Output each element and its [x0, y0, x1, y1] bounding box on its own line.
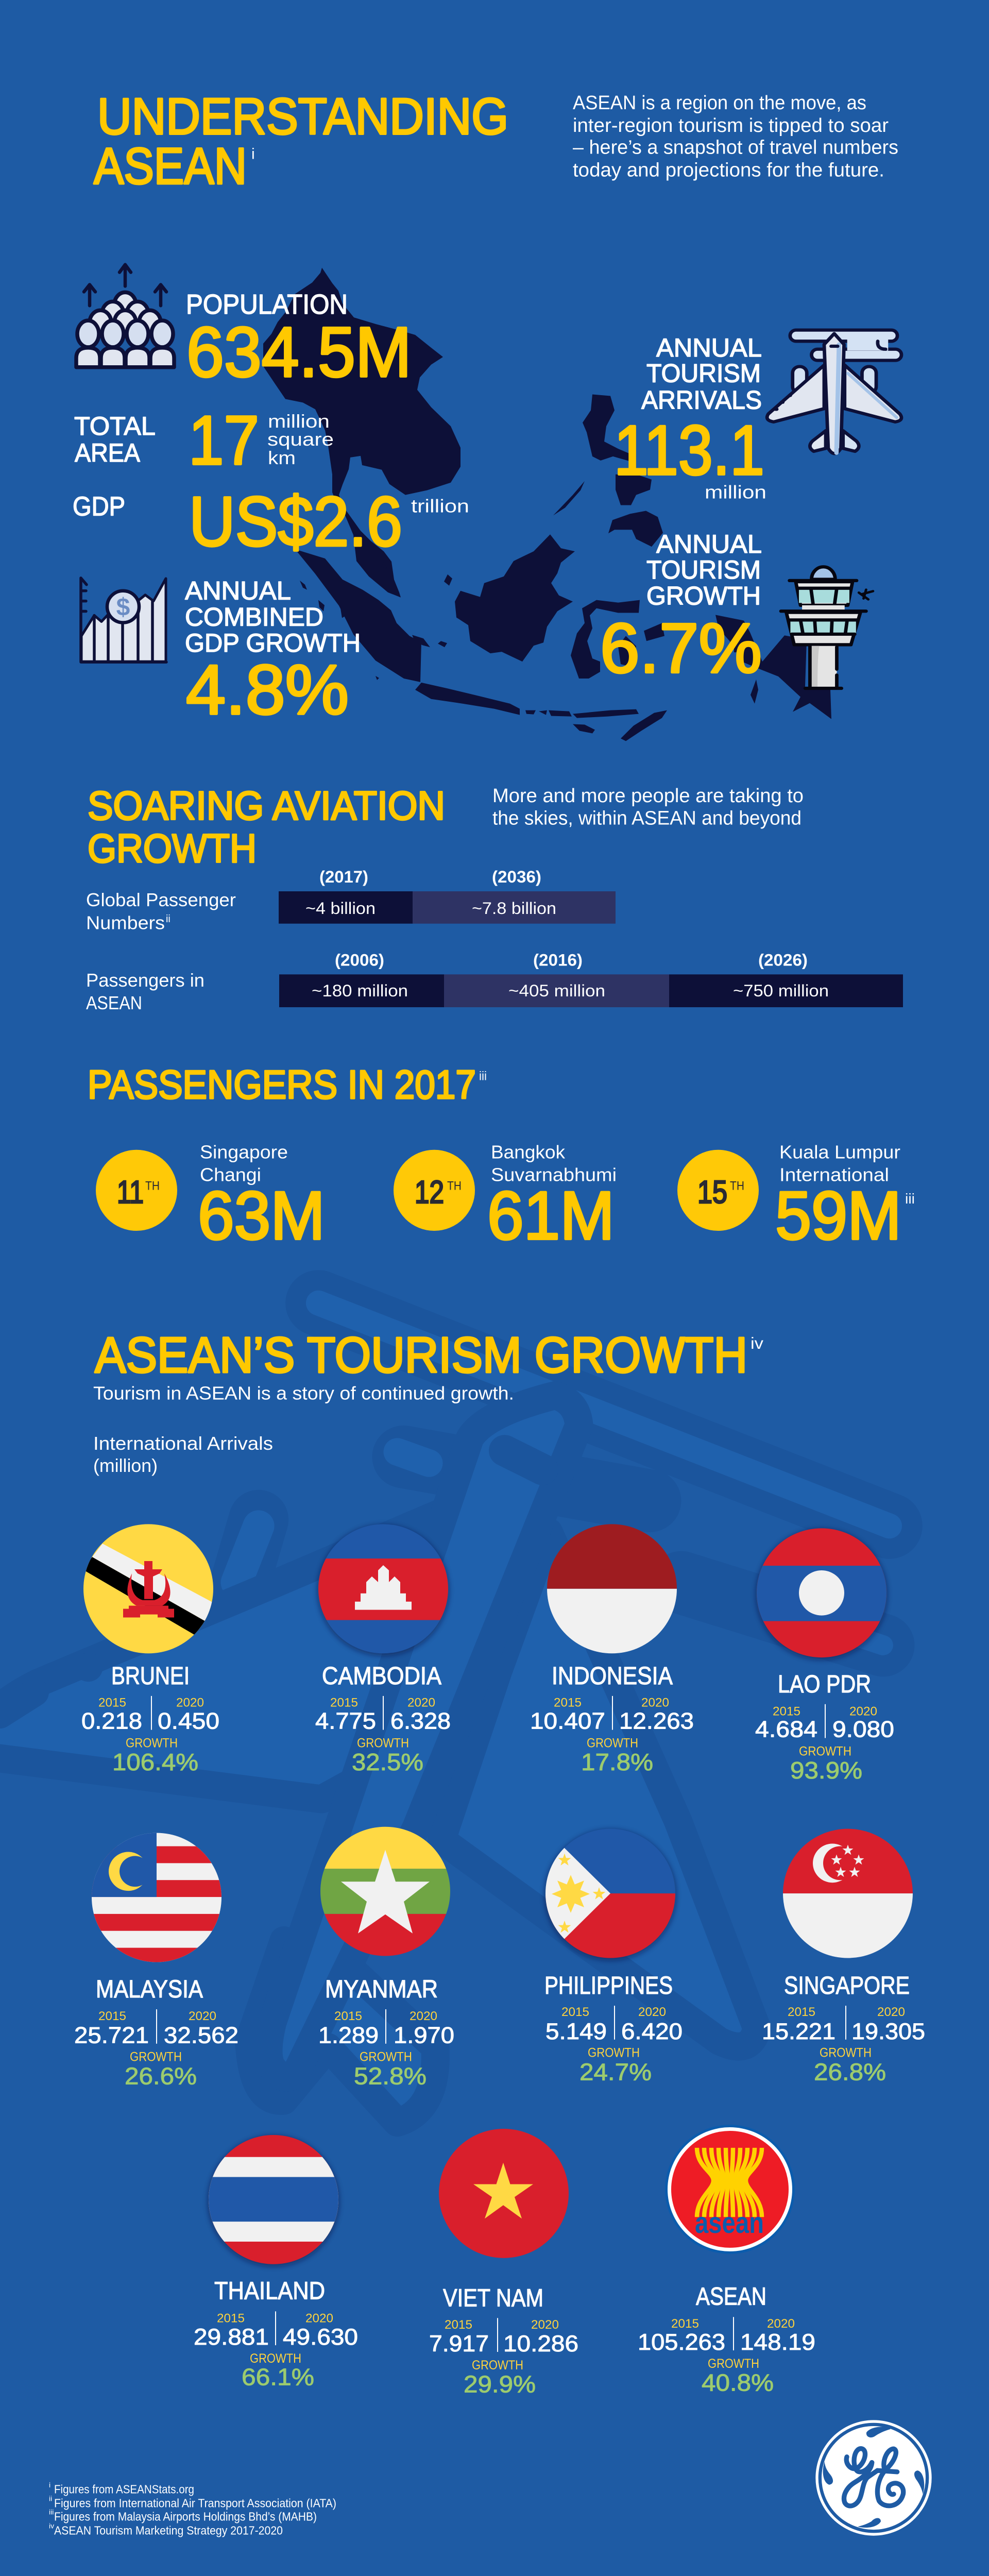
- arrivals 2015 and 2020: 2020: [176, 1696, 204, 1710]
- arrivals 2015 and 2020: 2015: [561, 2005, 589, 2019]
- flag: Indonesia: [546, 1523, 680, 1655]
- label: annual tourism arrivals: [641, 333, 762, 414]
- text: international arrivals label: International Arrivals: [93, 1433, 273, 1454]
- label: total area: [74, 412, 156, 467]
- arrivals 2015 and 2020: 2015: [330, 1696, 358, 1710]
- panel: Bangkok Suvarnabhumi: [394, 1142, 617, 1254]
- title: UNDERSTANDING: [97, 88, 508, 145]
- flag shadow: [544, 1829, 676, 1960]
- country name: MYANMAR: [325, 1976, 438, 2003]
- growth: 26.8%: [814, 2059, 886, 2085]
- label: annual tourism arrivals: ARRIVALS: [641, 385, 762, 414]
- growth: 40.8%: [702, 2369, 774, 2396]
- text: international arrivals label: [93, 1433, 273, 1476]
- bar: 2017: [279, 867, 413, 924]
- row label: Numbers: [86, 912, 165, 934]
- bar: 2016: ~405 million: [508, 981, 605, 1000]
- airport name: Singapore: [200, 1142, 288, 1163]
- growth: GROWTH: [126, 1736, 178, 1750]
- arrivals 2015 and 2020: 29.881: [194, 2324, 269, 2350]
- arrivals 2015 and 2020: 2015: [788, 2005, 815, 2019]
- arrivals 2015 and 2020: [318, 2009, 454, 2048]
- arrivals 2015 and 2020: 2015: [217, 2311, 245, 2325]
- intro text: – here’s a snapshot of travel numbers: [573, 137, 898, 159]
- heading: soaring aviation growth: [88, 784, 445, 871]
- arrivals 2015 and 2020: [429, 2318, 578, 2357]
- growth: [581, 1736, 653, 1775]
- label: annual combined GDP growth: COMBINED: [185, 603, 323, 631]
- passenger count: 59M: [775, 1178, 901, 1254]
- footnotes: iv: [49, 2521, 54, 2530]
- growth: [352, 1736, 423, 1775]
- rank badge: 11: [117, 1175, 144, 1210]
- arrivals 2015 and 2020: 32.562: [164, 2022, 238, 2048]
- footnotes: ii: [49, 2495, 52, 2503]
- row label: ASEAN: [86, 992, 142, 1013]
- title: i: [251, 146, 255, 163]
- arrivals 2015 and 2020: [638, 2317, 815, 2355]
- growth: [579, 2046, 652, 2085]
- arrivals 2015 and 2020: [315, 1696, 451, 1734]
- arrivals 2015 and 2020: 1.970: [394, 2022, 454, 2048]
- panel: ASEAN total: [638, 2125, 815, 2396]
- bar: 2016: [444, 950, 669, 1007]
- country name: CAMBODIA: [322, 1663, 441, 1690]
- label: annual tourism growth: TOURISM: [646, 555, 761, 584]
- bar: 2006: (2006): [335, 950, 384, 969]
- growth: [464, 2358, 536, 2398]
- arrivals 2015 and 2020: 2020: [410, 2009, 437, 2023]
- arrivals 2015 and 2020: 2015: [773, 1705, 800, 1719]
- intro text: ASEAN is a region on the move, as: [573, 92, 866, 114]
- unit: million: million: [705, 482, 766, 503]
- rank badge: TH: [447, 1179, 462, 1193]
- arrivals 2015 and 2020: 2020: [305, 2311, 333, 2325]
- arrivals 2015 and 2020: 9.080: [832, 1716, 894, 1742]
- arrivals 2015 and 2020: 1.289: [318, 2022, 379, 2048]
- country name: SINGAPORE: [784, 1972, 910, 1999]
- bar: 2006: [279, 950, 444, 1007]
- row label: ii: [166, 913, 170, 925]
- label: total area: AREA: [75, 438, 141, 467]
- label: annual combined GDP growth: [185, 577, 361, 657]
- footnote marker: iii: [905, 1191, 915, 1207]
- footnotes: [49, 2481, 336, 2537]
- growth: [814, 2046, 886, 2085]
- airport name: Bangkok: [491, 1142, 565, 1163]
- arrivals 2015 and 2020: 2020: [767, 2317, 795, 2331]
- arrivals 2015 and 2020: 12.263: [619, 1708, 694, 1734]
- arrivals 2015 and 2020: 7.917: [429, 2330, 489, 2357]
- panel: Singapore Changi: [96, 1142, 325, 1254]
- unit: million square km: square: [267, 429, 334, 450]
- flag: Lao PDR: [755, 1526, 889, 1660]
- text: aviation intro: the skies, within ASEAN and beyond: [492, 808, 802, 829]
- label: annual combined GDP growth: GDP GROWTH: [185, 629, 361, 657]
- bar: 2017: ~4 billion: [305, 899, 376, 918]
- growth: GROWTH: [587, 1736, 638, 1750]
- panel: key statistics: [73, 265, 901, 729]
- label: annual tourism arrivals: TOURISM: [646, 359, 761, 388]
- arrivals 2015 and 2020: 2015: [445, 2318, 472, 2332]
- flag: Thailand: [206, 2133, 341, 2267]
- footnotes: iii: [49, 2508, 54, 2516]
- panel: Cambodia: [314, 1523, 453, 1775]
- label: annual tourism arrivals: ANNUAL: [656, 333, 762, 362]
- arrivals 2015 and 2020: 19.305: [851, 2018, 925, 2044]
- growth: 66.1%: [242, 2364, 314, 2391]
- icon: GDP growth chart: [81, 578, 166, 662]
- bar: 2016: (2016): [533, 950, 583, 969]
- arrivals 2015 and 2020: 2020: [189, 2009, 216, 2023]
- bar: 2026: (2026): [758, 950, 808, 969]
- row label: Passengers in: [86, 970, 204, 991]
- country name: LAO PDR: [778, 1671, 871, 1698]
- footnotes: Figures from ASEANStats.org: [54, 2483, 194, 2496]
- icon: population crowd: [76, 265, 174, 367]
- arrivals 2015 and 2020: [194, 2311, 358, 2350]
- growth: GROWTH: [250, 2351, 301, 2366]
- heading: passengers in 2017: iii: [479, 1069, 487, 1083]
- arrivals 2015 and 2020: 2020: [638, 2005, 666, 2019]
- arrivals 2015 and 2020: 2015: [98, 1696, 126, 1710]
- bar: 2036: ~7.8 billion: [472, 899, 556, 918]
- flag: Brunei: [82, 1523, 216, 1656]
- name: ASEAN: [696, 2283, 766, 2310]
- arrivals 2015 and 2020: [81, 1696, 219, 1734]
- emblem: ASEAN: [665, 2125, 795, 2254]
- arrivals 2015 and 2020: 2015: [98, 2009, 126, 2023]
- unit: million square km: million: [268, 411, 330, 432]
- growth: 26.6%: [125, 2062, 197, 2089]
- arrivals 2015 and 2020: 6.420: [621, 2018, 683, 2044]
- arrivals 2015 and 2020: 105.263: [638, 2329, 725, 2355]
- growth: GROWTH: [588, 2046, 640, 2060]
- arrivals 2015 and 2020: [762, 2005, 925, 2044]
- bar: 2036: (2036): [492, 867, 541, 886]
- flag shadow: [756, 1529, 888, 1660]
- passenger count: 63M: [198, 1178, 325, 1254]
- heading: passengers in 2017: PASSENGERS IN 2017: [88, 1063, 476, 1107]
- footnotes: i: [49, 2481, 50, 2489]
- country name: THAILAND: [214, 2278, 325, 2304]
- country name: INDONESIA: [552, 1663, 673, 1690]
- airport name: [779, 1142, 900, 1185]
- country name: MALAYSIA: [96, 1976, 203, 2003]
- chart: passengers in ASEAN: [86, 950, 903, 1013]
- bar: 2017: (2017): [319, 867, 368, 886]
- flag: Singapore: [780, 1826, 919, 1961]
- arrivals 2015 and 2020: 2020: [531, 2318, 559, 2332]
- growth: [242, 2351, 314, 2391]
- arrivals 2015 and 2020: 0.218: [81, 1708, 142, 1734]
- footnotes: Figures from International Air Transport Association (IATA): [54, 2497, 336, 2510]
- label: population: POPULATION: [186, 289, 348, 320]
- value: total area: 17: [189, 401, 259, 479]
- heading: soaring aviation growth: GROWTH: [88, 826, 257, 871]
- growth: GROWTH: [130, 2050, 182, 2064]
- growth: 106.4%: [112, 1749, 198, 1775]
- growth: GROWTH: [360, 2050, 412, 2064]
- arrivals 2015 and 2020: 2020: [641, 1696, 669, 1710]
- arrivals 2015 and 2020: 2015: [554, 1696, 582, 1710]
- arrivals 2015 and 2020: 2015: [671, 2317, 699, 2331]
- panel: Brunei: [81, 1523, 219, 1775]
- airport name: Changi: [200, 1164, 261, 1185]
- arrivals 2015 and 2020: 6.328: [390, 1708, 451, 1734]
- country name: VIET NAM: [443, 2285, 543, 2312]
- text: aviation intro: [492, 785, 804, 829]
- arrivals 2015 and 2020: [545, 2005, 683, 2044]
- watermark: large background plane: [0, 1303, 890, 2123]
- icon: control tower: [781, 567, 873, 688]
- row label: Global Passenger: [86, 889, 236, 910]
- arrivals 2015 and 2020: 2020: [407, 1696, 435, 1710]
- arrivals 2015 and 2020: 10.407: [530, 1708, 605, 1734]
- footnotes: Figures from Malaysia Airports Holdings Bhd’s (MAHB): [54, 2510, 317, 2523]
- unit: trillion: trillion: [411, 496, 469, 516]
- growth: 24.7%: [579, 2059, 652, 2085]
- arrivals 2015 and 2020: 2020: [877, 2005, 905, 2019]
- text: aviation intro: More and more people are taking to: [492, 785, 804, 807]
- heading: ASEAN's tourism growth: iv: [751, 1334, 763, 1352]
- label: annual combined GDP growth: ANNUAL: [185, 577, 291, 605]
- label: GDP: GDP: [73, 492, 125, 521]
- panel: Singapore: [762, 1826, 925, 2085]
- airport name: [491, 1142, 617, 1185]
- growth: [125, 2050, 197, 2089]
- bar: 2036: [413, 867, 616, 924]
- airport name: [200, 1142, 288, 1185]
- bar: 2026: [669, 950, 903, 1007]
- value: tourism arrivals: 113.1: [614, 411, 764, 489]
- flag: Myanmar: [320, 1827, 450, 1956]
- label: total area: TOTAL: [74, 412, 156, 440]
- chart: global passenger numbers: [86, 867, 616, 934]
- growth: [112, 1736, 198, 1775]
- bar: 2006: ~180 million: [312, 981, 408, 1000]
- arrivals 2015 and 2020: 10.286: [503, 2330, 578, 2357]
- intro text: inter-region tourism is tipped to soar: [573, 115, 889, 137]
- bar: 2026: ~750 million: [733, 981, 829, 1000]
- label: annual tourism growth: ANNUAL: [656, 530, 762, 558]
- heading: ASEAN's tourism growth: ASEAN’S TOURISM GROWTH: [95, 1327, 747, 1383]
- airport name: Suvarnabhumi: [491, 1164, 617, 1185]
- growth: 29.9%: [464, 2371, 536, 2398]
- arrivals 2015 and 2020: 2020: [849, 1705, 877, 1719]
- row label: [86, 889, 236, 934]
- arrivals 2015 and 2020: 4.775: [315, 1708, 376, 1734]
- arrivals 2015 and 2020: 148.19: [740, 2329, 815, 2355]
- country name: PHILIPPINES: [544, 1972, 673, 1999]
- arrivals 2015 and 2020: 0.450: [158, 1708, 219, 1734]
- growth: 32.5%: [352, 1749, 423, 1775]
- icon: airplane: [767, 330, 901, 453]
- flag: Philippines: [545, 1829, 675, 1958]
- title: ASEAN: [94, 138, 247, 195]
- country name: BRUNEI: [111, 1663, 190, 1690]
- growth: GROWTH: [708, 2357, 759, 2371]
- arrivals 2015 and 2020: [530, 1696, 694, 1734]
- growth: GROWTH: [357, 1736, 409, 1750]
- text: international arrivals label: (million): [93, 1455, 158, 1476]
- growth: 17.8%: [581, 1749, 653, 1775]
- flag: Cambodia: [314, 1523, 453, 1656]
- label: annual tourism growth: GROWTH: [646, 582, 761, 611]
- emblem: ASEAN: asean: [695, 2207, 764, 2240]
- arrivals 2015 and 2020: 4.684: [755, 1716, 817, 1742]
- panel: Philippines: [536, 1820, 683, 2085]
- icon: GDP growth chart: $: [116, 594, 130, 621]
- arrivals 2015 and 2020: 49.630: [283, 2324, 358, 2350]
- unit: million square km: [267, 411, 334, 468]
- label: annual tourism growth: [646, 530, 762, 611]
- title: [94, 88, 508, 195]
- growth: GROWTH: [820, 2046, 872, 2060]
- passenger count: 61M: [487, 1178, 615, 1254]
- icon: GE logo: [815, 2420, 932, 2536]
- airport name: Kuala Lumpur: [779, 1142, 900, 1163]
- growth: 52.8%: [354, 2062, 427, 2089]
- rank badge: TH: [730, 1179, 744, 1193]
- panel: Kuala Lumpur International: [677, 1142, 915, 1254]
- rank badge: TH: [145, 1179, 160, 1193]
- growth: GROWTH: [472, 2358, 523, 2372]
- growth: [354, 2050, 427, 2089]
- arrivals 2015 and 2020: 15.221: [762, 2018, 835, 2044]
- flag shadow: [208, 2136, 339, 2267]
- arrivals 2015 and 2020: [755, 1704, 894, 1742]
- panel: Thailand: [194, 2133, 358, 2391]
- arrivals 2015 and 2020: 25.721: [74, 2022, 149, 2048]
- arrivals 2015 and 2020: 2015: [334, 2009, 362, 2023]
- unit: million square km: km: [268, 447, 296, 468]
- heading: soaring aviation growth: SOARING AVIATION: [88, 784, 445, 828]
- panel: Indonesia: [530, 1523, 694, 1775]
- panel: Lao PDR: [755, 1526, 894, 1784]
- rank badge: 12: [415, 1175, 444, 1210]
- intro text: today and projections for the future.: [573, 160, 884, 181]
- value: GDP growth: 4.8%: [186, 650, 349, 729]
- rank badge: [394, 1150, 475, 1231]
- map of Southeast Asia: [263, 268, 831, 741]
- row label: [86, 970, 204, 1013]
- panel: Malaysia: [74, 1831, 238, 2089]
- rank badge: 15: [697, 1175, 727, 1210]
- panel: Myanmar: [317, 1826, 456, 2089]
- flag shadow: [317, 1524, 449, 1656]
- growth: [790, 1744, 862, 1784]
- flag: Viet Nam: [439, 2129, 569, 2258]
- value: tourism growth: 6.7%: [600, 608, 762, 687]
- rank badge: [96, 1150, 177, 1231]
- arrivals 2015 and 2020: [74, 2009, 238, 2048]
- growth: [702, 2357, 774, 2396]
- text: tourism intro: Tourism in ASEAN is a story of continued growth.: [93, 1383, 514, 1403]
- growth: 93.9%: [790, 1757, 862, 1784]
- value: population: 634.5M: [186, 313, 412, 392]
- airport name: International: [779, 1164, 889, 1185]
- panel: Viet Nam: [429, 2129, 578, 2398]
- rank badge: [677, 1150, 759, 1231]
- flag: Malaysia: [88, 1831, 227, 1964]
- arrivals 2015 and 2020: 5.149: [545, 2018, 607, 2044]
- value: GDP: US$2.6: [189, 482, 402, 561]
- growth: GROWTH: [799, 1744, 851, 1758]
- footnotes: ASEAN Tourism Marketing Strategy 2017-2020: [54, 2523, 283, 2537]
- intro text: [573, 92, 898, 181]
